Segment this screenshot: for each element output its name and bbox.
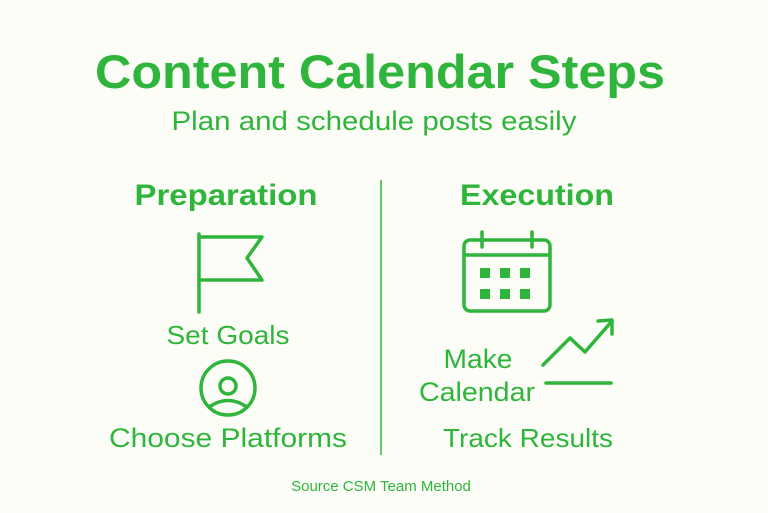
title: Content Calendar Steps: [95, 45, 665, 98]
label: Make Calendar: Make: [444, 344, 512, 374]
icon: person: [201, 361, 255, 415]
icon: calendar: [464, 232, 550, 311]
subtitle: Plan and schedule posts easily: [172, 106, 577, 136]
label: Choose Platforms: Choose Platforms: [109, 423, 347, 453]
heading: Execution: Execution: [460, 179, 614, 212]
heading: Preparation: Preparation: [134, 179, 318, 212]
label: Track Results: Track Results: [443, 423, 613, 453]
label: Set Goals: Set Goals: [166, 320, 290, 350]
source: Source CSM Team Method: [291, 478, 471, 495]
icon: flag: [199, 234, 262, 312]
icon: trend chart: [543, 320, 612, 383]
label: Make Calendar: Calendar: [419, 377, 535, 407]
